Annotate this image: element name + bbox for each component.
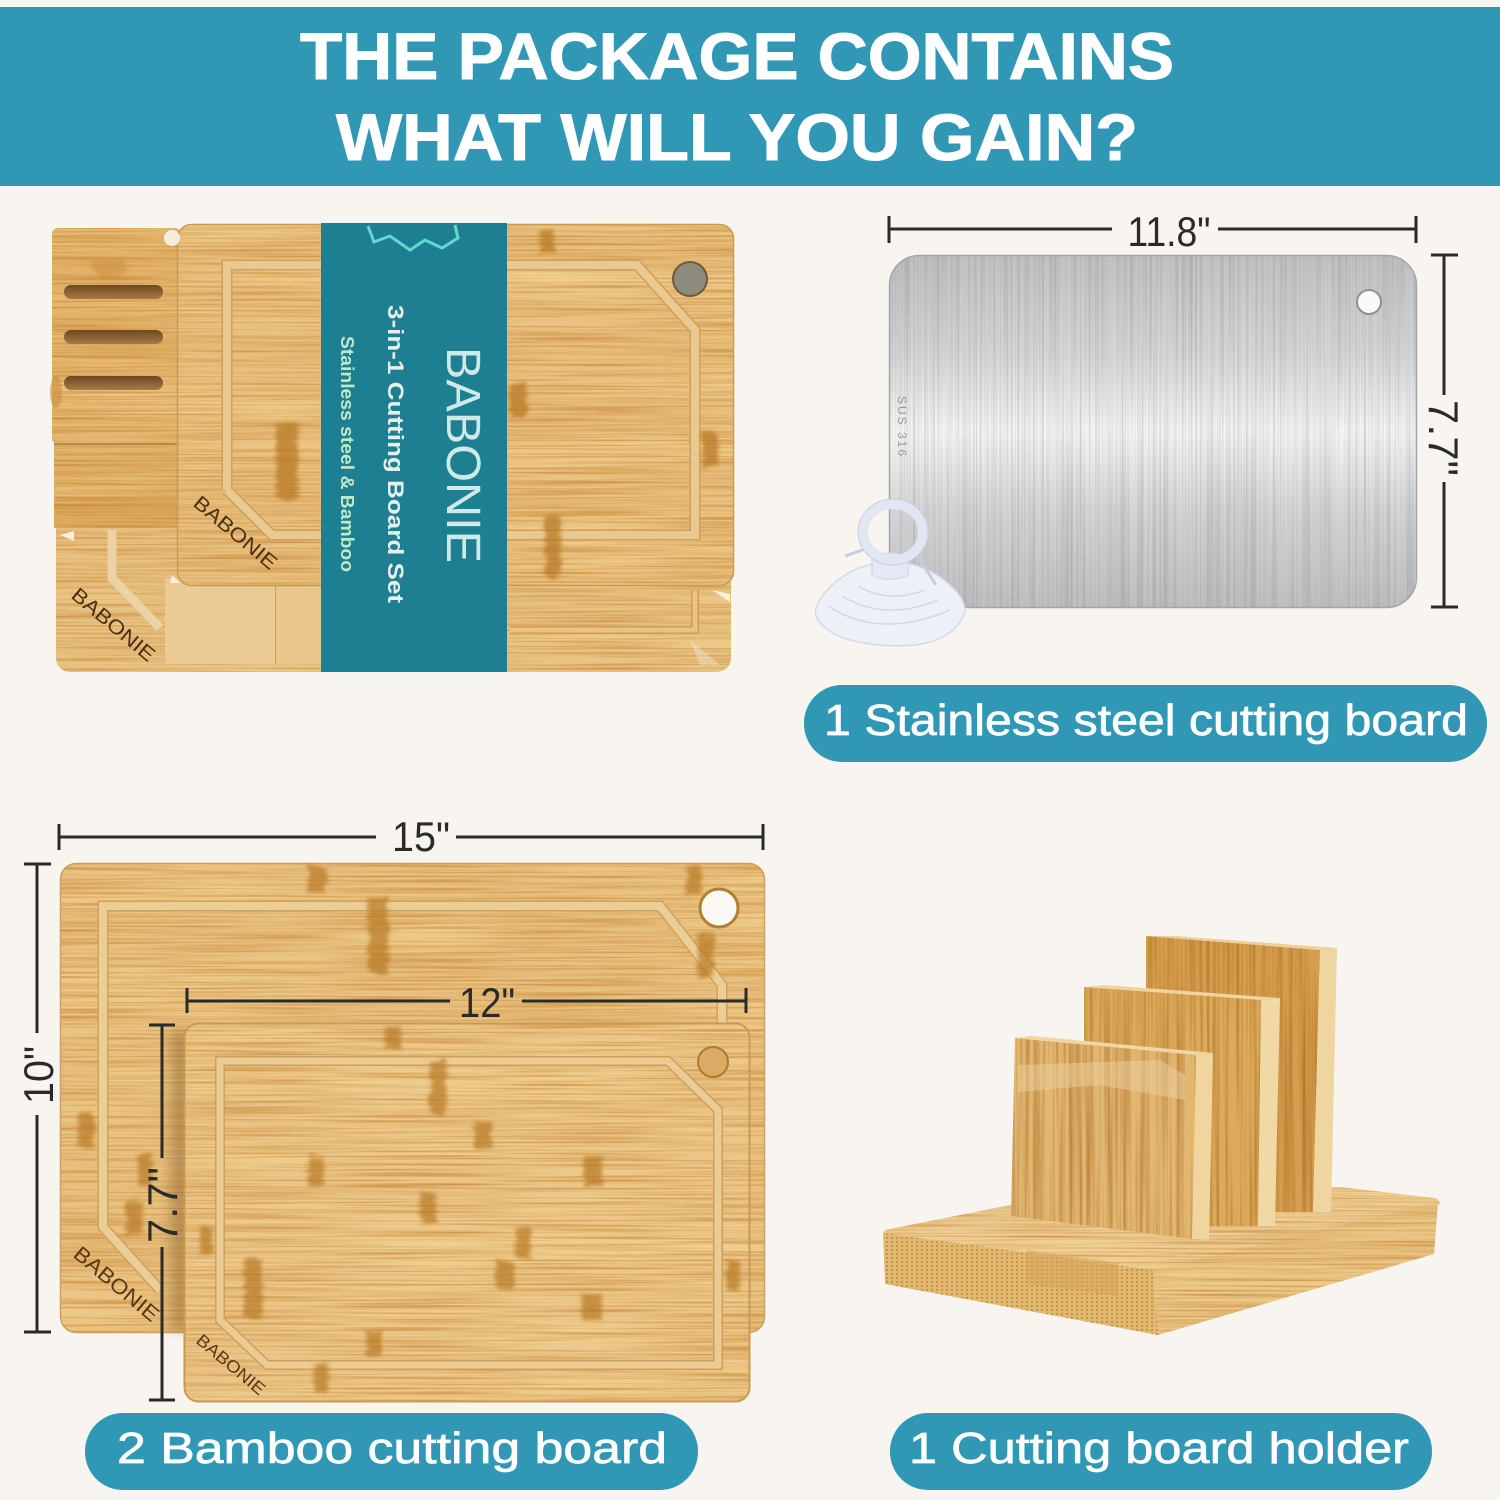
header banner: [0, 7, 1500, 186]
dimension: 12 inch: 12": [459, 979, 515, 1026]
stainless steel board: SUS 316: [895, 396, 909, 458]
sleeve subtitle: Stainless steel & Bamboo: [337, 336, 357, 572]
dimension: 15 inch: 15": [392, 813, 450, 860]
large bamboo board: [60, 863, 765, 1333]
sleeve brand: BABONIE: [436, 347, 489, 563]
holder board front: [1011, 1036, 1213, 1240]
dimension: 7.7 inch bamboo: [139, 1025, 186, 1400]
label: holder: [890, 1413, 1432, 1490]
small bamboo board: [184, 1023, 750, 1402]
holder slots: [64, 285, 163, 390]
label: bamboo boards: [85, 1413, 698, 1490]
label: stainless steel: [804, 685, 1487, 762]
dimension: 12 inch: [187, 979, 746, 1026]
packaged holder blocks: [50, 228, 324, 664]
label: holder: 1 Cutting board holder: [909, 1424, 1409, 1473]
brand large board: BABONIE: [69, 1242, 163, 1327]
dimension: 11.8 inch: [889, 208, 1416, 255]
title line 1: THE PACKAGE CONTAINS: [300, 19, 1174, 93]
board shadow: [170, 1030, 194, 1330]
product sleeve: [321, 223, 507, 672]
label: bamboo boards: 2 Bamboo cutting board: [117, 1424, 667, 1473]
label: stainless steel: 1 Stainless steel cutting board: [824, 696, 1468, 745]
stainless steel board: [889, 255, 1417, 608]
brand on board: BABONIE: [189, 492, 281, 574]
packaged top board: [177, 224, 734, 586]
cutting board holder: [883, 936, 1440, 1335]
sleeve title: 3-in-1 Cutting Board Set: [383, 305, 408, 604]
sleeve scribble: [368, 225, 458, 250]
dimension: 7.7 inch steel: 7.7": [1420, 400, 1467, 476]
dimension: 10 inch: [15, 864, 62, 1332]
title line 2: WHAT WILL YOU GAIN?: [336, 100, 1138, 174]
dimension: 7.7 inch bamboo: 7.7": [139, 1167, 186, 1243]
brand on lower board: BABONIE: [67, 584, 159, 666]
packaged lower board: [56, 500, 731, 672]
hang hole: [673, 262, 707, 296]
holder board back: [1146, 936, 1337, 1212]
brand small board: BABONIE: [192, 1331, 269, 1399]
icon: suction cup: [815, 499, 965, 646]
panel: packaged set photo: [50, 223, 734, 672]
holder board middle: [1084, 985, 1280, 1226]
dimension: 15 inch: [59, 813, 763, 860]
holder base: [883, 1187, 1440, 1335]
dimension: 11.8 inch: 11.8": [1128, 208, 1210, 255]
shrink wrap highlights: [60, 230, 730, 665]
dimension: 10 inch: 10": [15, 1046, 62, 1104]
dimension: 7.7 inch steel: [1420, 255, 1467, 607]
